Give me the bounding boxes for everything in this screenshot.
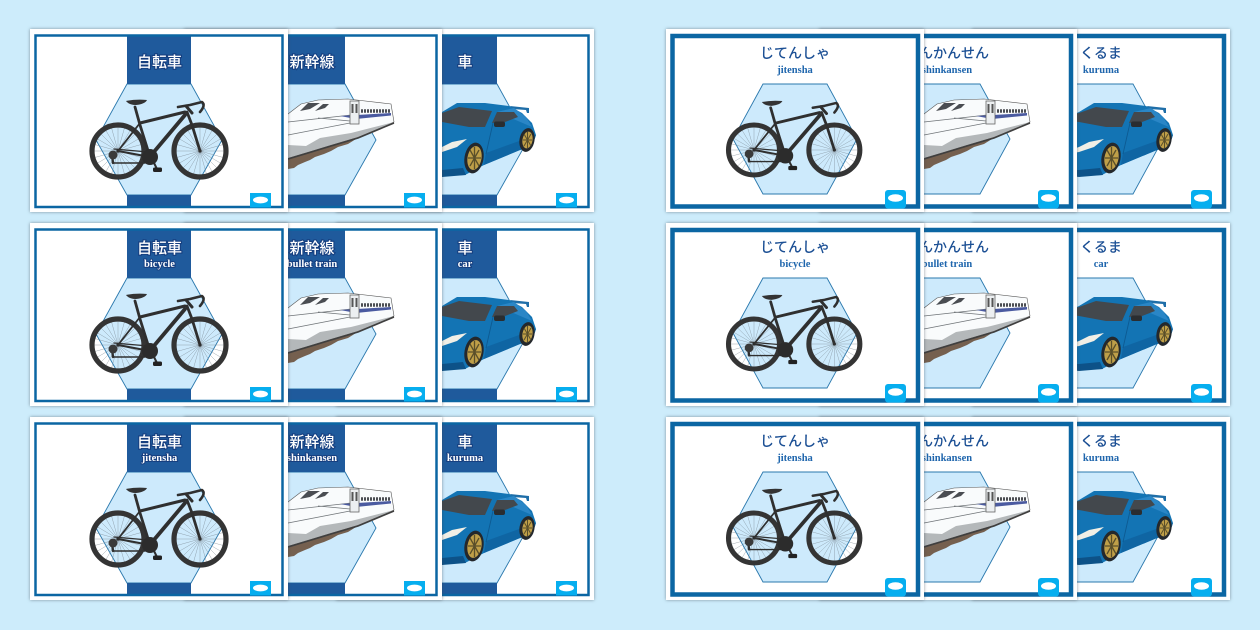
card: car row 2: car (458, 259, 473, 270)
card: car row 3 (336, 417, 594, 600)
card: jitensha row 2: じてんしゃ (760, 239, 830, 255)
card: shinkansen row 1 (819, 29, 1077, 212)
card: bullet train row 2: 新幹線 (289, 240, 335, 257)
card: bicycle row 3 (30, 417, 288, 600)
card: bicycle row 2: 自転車 (137, 240, 182, 257)
card: bullet train row 3: 新幹線 (289, 434, 335, 451)
card: bicycle row 1 (30, 29, 288, 212)
card: shinkansen row 3: しんかんせん (905, 433, 989, 449)
card: bullet train row 2: bullet train (287, 259, 337, 270)
card: bicycle row 3: 自転車 (137, 434, 182, 451)
card: bicycle row 2 (30, 223, 288, 406)
card: bicycle row 1: 自転車 (137, 54, 182, 71)
card: bullet train row 1: 新幹線 (289, 54, 335, 71)
card: jitensha row 1: jitensha (776, 65, 814, 76)
card: bullet train row 2 (184, 223, 442, 406)
card: car row 1 (336, 29, 594, 212)
card: shinkansen row 2: しんかんせん (905, 239, 989, 255)
card: bullet train row 1 (184, 29, 442, 212)
card: bicycle row 3: jitensha (141, 453, 178, 464)
card: kuruma row 2: car (1094, 259, 1109, 270)
card: car row 3: 車 (457, 434, 473, 451)
panel: left set kanji flashcards (30, 29, 594, 600)
card: shinkansen row 1: しんかんせん (905, 45, 989, 61)
card: shinkansen row 2: bullet train (922, 259, 972, 270)
card: shinkansen row 1: shinkansen (922, 65, 972, 76)
card: shinkansen row 3: shinkansen (922, 453, 972, 464)
card: bullet train row 3 (184, 417, 442, 600)
card: car row 3: kuruma (447, 453, 484, 464)
card: jitensha row 2 (666, 223, 924, 406)
panel: right set hiragana flashcards (666, 29, 1230, 600)
card: jitensha row 3: jitensha (776, 453, 814, 464)
card: bicycle row 2: bicycle (144, 259, 175, 270)
card: kuruma row 3: kuruma (1083, 453, 1120, 464)
card: kuruma row 2: くるま (1080, 239, 1122, 255)
card: kuruma row 1: kuruma (1083, 65, 1120, 76)
card: jitensha row 3: じてんしゃ (760, 433, 830, 449)
card: jitensha row 2: bicycle (780, 259, 811, 270)
card: jitensha row 3 (666, 417, 924, 600)
card: kuruma row 3: くるま (1080, 433, 1122, 449)
card: shinkansen row 3 (819, 417, 1077, 600)
card: car row 2: 車 (457, 240, 473, 257)
card: bullet train row 3: shinkansen (287, 453, 337, 464)
card: jitensha row 1 (666, 29, 924, 212)
card: shinkansen row 2 (819, 223, 1077, 406)
card: kuruma row 3 (972, 417, 1230, 600)
card: jitensha row 1: じてんしゃ (760, 45, 830, 61)
card: kuruma row 1: くるま (1080, 45, 1122, 61)
card: car row 1: 車 (457, 54, 473, 71)
card: car row 2 (336, 223, 594, 406)
card: kuruma row 1 (972, 29, 1230, 212)
card: kuruma row 2 (972, 223, 1230, 406)
